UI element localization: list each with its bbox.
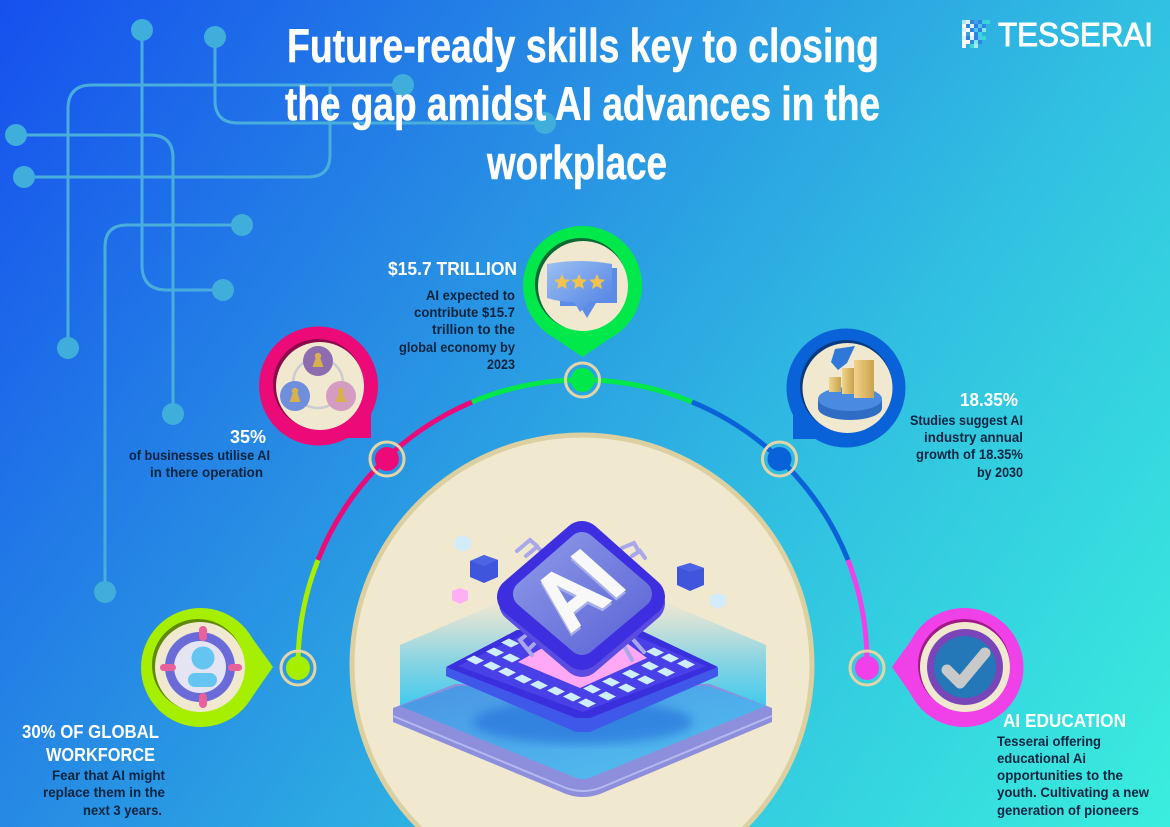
pin: magenta education: [892, 608, 1024, 727]
text: $15.7 trillion: AI expected to: [426, 288, 515, 303]
chip: AI: [513, 535, 643, 646]
text: 30% of global workforce: WORKFORCE: [46, 745, 155, 765]
text: $15.7 trillion: [388, 259, 517, 372]
logo: Tesserai: TESSERAI: [998, 16, 1153, 53]
text: AI education: opportunities to the: [997, 768, 1123, 783]
text: 30% of global workforce: Fear that AI might: [52, 768, 165, 783]
icon: rating speech bubble: [547, 261, 617, 318]
text: $15.7 trillion: trillion to the: [432, 322, 515, 337]
large cream circle: [350, 433, 814, 827]
circuit lines decoration: [5, 19, 556, 603]
text: AI education: Tesserai offering: [997, 734, 1101, 749]
icon: person target: [160, 626, 242, 708]
node: pink: [370, 442, 404, 476]
text: 30% of global workforce: [22, 722, 165, 818]
chip: AI: [513, 538, 643, 649]
title: the gap amidst AI advances in the: [285, 77, 880, 130]
text: 18.35% growth: 18.35%: [960, 390, 1018, 410]
text: $15.7 trillion: global economy by: [399, 340, 515, 355]
text: AI education: AI EDUCATION: [1003, 711, 1126, 731]
text: 35% businesses: [129, 427, 270, 480]
node: magenta: [850, 651, 884, 685]
text: 35% businesses: 35%: [230, 427, 266, 447]
icon: three people network: [280, 346, 356, 411]
text: AI education: educational Ai: [997, 751, 1086, 766]
text: 30% of global workforce: next 3 years.: [83, 803, 162, 818]
pin: pink businesses: [259, 326, 378, 446]
text: 18.35% growth: by 2030: [977, 465, 1023, 480]
chip connectors: [517, 540, 645, 660]
icon: check mark badge: [927, 629, 1003, 705]
floating cubes: [452, 535, 726, 609]
title: [285, 19, 880, 189]
text: $15.7 trillion: contribute $15.7: [414, 305, 515, 320]
title: workplace: [486, 136, 667, 189]
text: 18.35% growth: Studies suggest AI: [910, 413, 1023, 428]
base plate: [393, 684, 772, 797]
text: 18.35% growth: industry annual: [924, 430, 1023, 445]
text: 35% businesses: of businesses utilise AI: [129, 448, 270, 463]
node: blue: [762, 442, 796, 476]
text: 18.35% growth: growth of 18.35%: [916, 447, 1023, 462]
timeline arc: [298, 380, 867, 665]
pin: green trillion: [523, 226, 642, 357]
icon: bar chart on disc: [818, 346, 882, 420]
pin: blue growth: [786, 328, 906, 448]
title: Future-ready skills key to closing: [287, 19, 879, 72]
text: 18.35% growth: [910, 390, 1023, 480]
node: green: [566, 363, 600, 397]
text: 30% of global workforce: replace them in the: [43, 785, 165, 800]
text: 30% of global workforce: 30% OF GLOBAL: [22, 722, 159, 742]
central AI chip illustration: [393, 535, 772, 797]
glow behind chip: [400, 600, 766, 712]
circuit board: [446, 630, 718, 732]
text: 35% businesses: in there operation: [150, 465, 263, 480]
text: $15.7 trillion: $15.7 TRILLION: [388, 259, 517, 279]
pin: lime workforce: [141, 608, 273, 727]
text: AI education: generation of pioneers: [997, 803, 1139, 818]
node: lime: [281, 651, 315, 685]
text: AI education: youth. Cultivating a new: [997, 785, 1149, 800]
text: AI education: [997, 711, 1149, 818]
text: $15.7 trillion: 2023: [487, 357, 515, 372]
